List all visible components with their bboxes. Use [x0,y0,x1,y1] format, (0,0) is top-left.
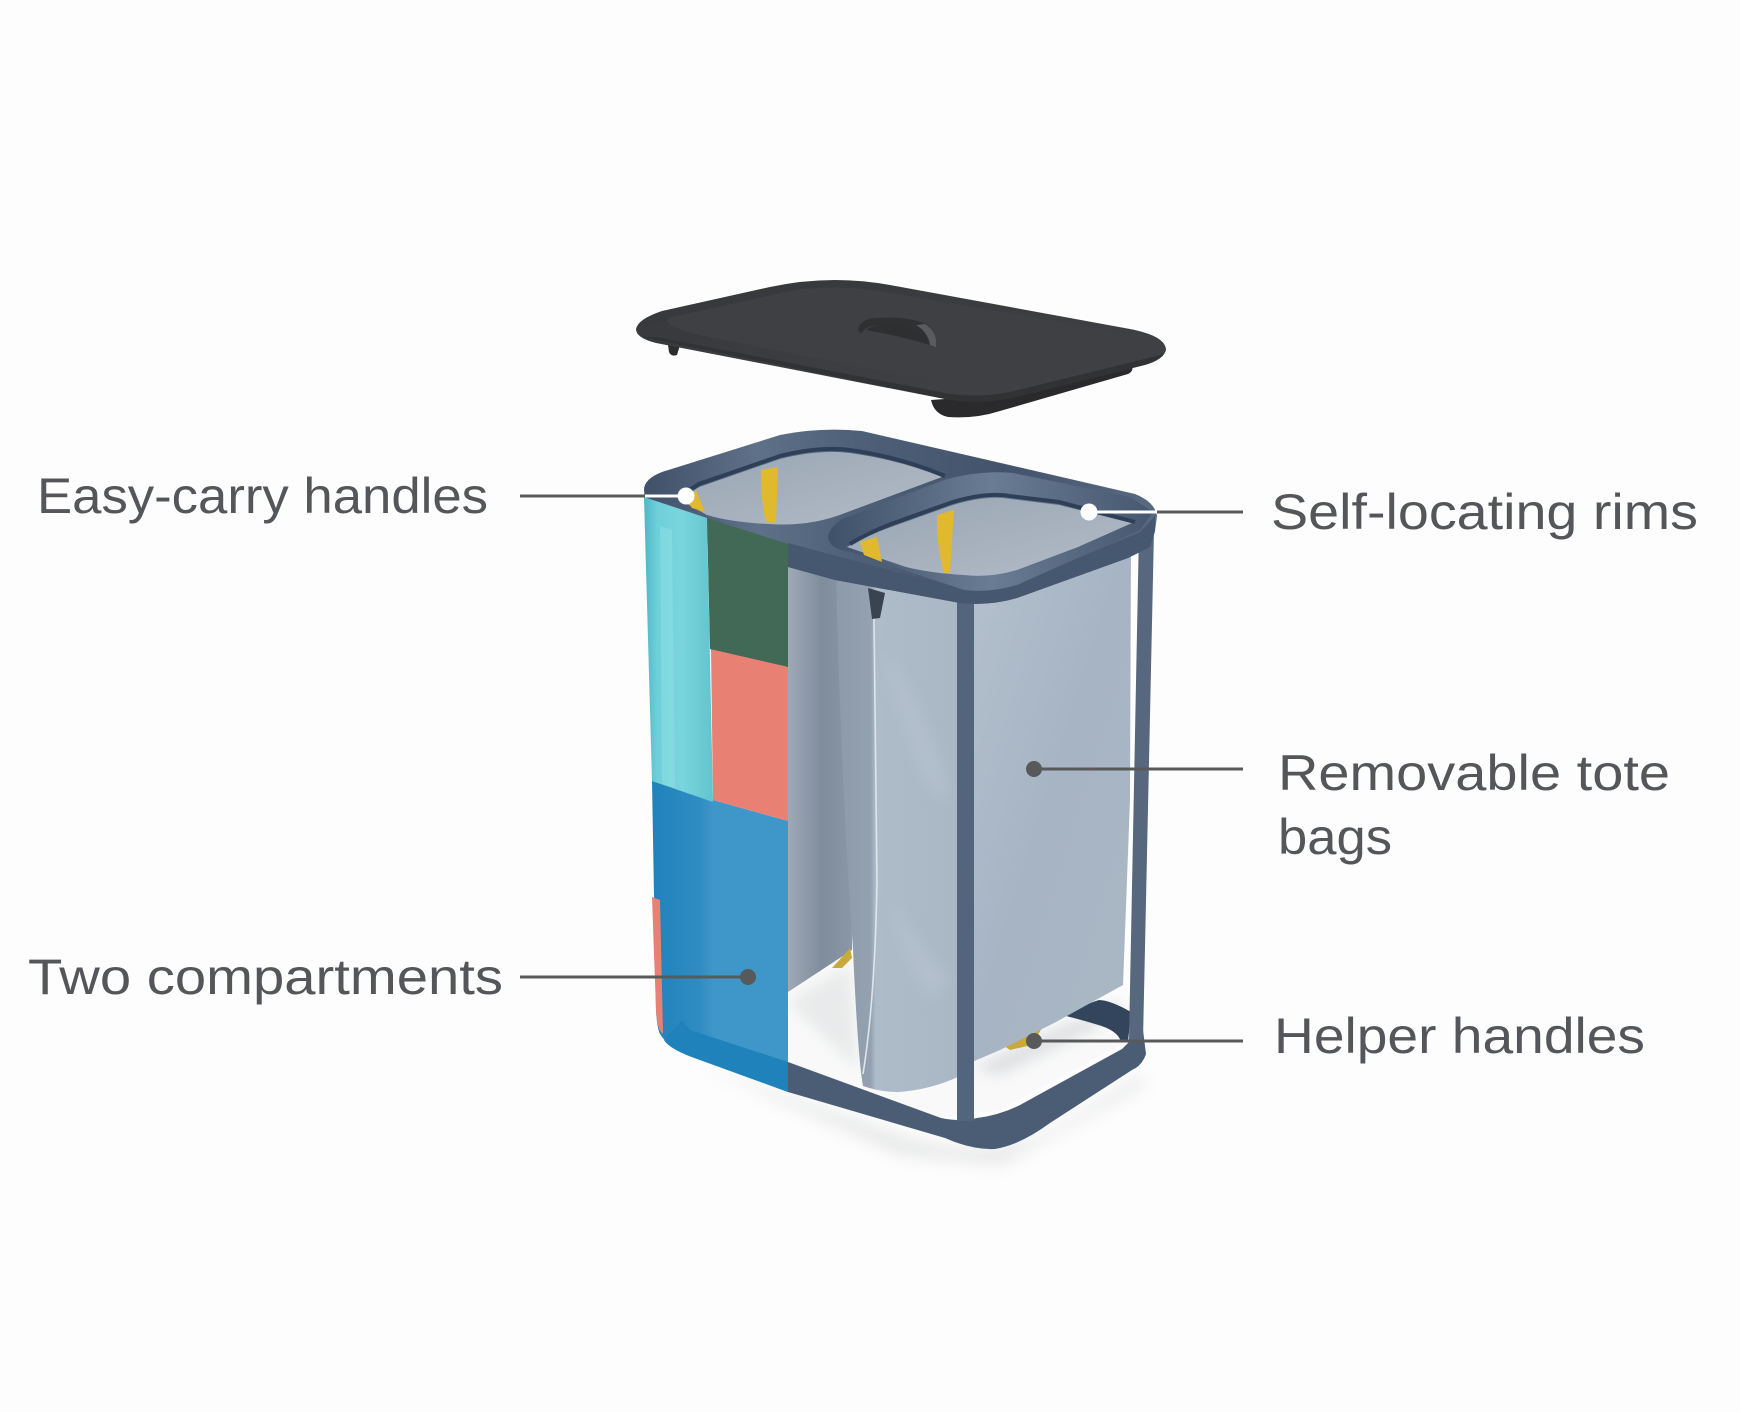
helper handle strap [1000,1019,1054,1050]
leader line [1080,504,1243,520]
illustration: laundry hamper frame and bags [644,430,1157,1149]
colour panel: green [707,518,788,667]
rear compartment opening [680,452,942,525]
bag folds [885,650,950,1000]
leader line [1026,1033,1243,1049]
colour panel: small salmon strip [652,897,663,1034]
front post [957,596,974,1121]
label: Helper handles [1274,1008,1645,1064]
callout: self-locating rims [1080,484,1698,540]
front compartment opening [847,498,1132,576]
icon: yellow handle straps [686,467,954,573]
leader line [520,488,694,504]
label: Self-locating rims [1271,484,1698,540]
floor shadow [700,1065,1145,1165]
right post [1129,530,1154,1040]
back tote bag [786,555,852,992]
icon: hamper lid [636,280,1166,417]
icon: lid handle [858,318,936,347]
callout: removable tote bags [1026,745,1670,865]
front compartment ring [828,472,1153,591]
back bag yellow strap [832,948,852,968]
label: bags [1278,809,1392,865]
base back section [1066,1000,1131,1042]
label: Removable tote [1278,745,1670,801]
floor inside base [788,952,1130,1118]
callout: easy-carry handles [37,468,694,524]
base front section [788,1030,1146,1149]
callout: two compartments [28,949,756,1005]
front tote bag face [970,545,1131,1062]
leader line [520,969,756,985]
bag seam [863,618,877,1074]
colour panel: blue [652,781,788,1092]
label: Two compartments [28,949,503,1005]
colour panel: salmon [711,649,788,821]
bag tag [868,588,885,619]
rim [644,430,1157,604]
leader line [1026,761,1243,777]
label: Easy-carry handles [37,468,488,524]
front tote bag side [836,570,960,1092]
colour panel: teal [644,497,713,802]
callout: helper handles [1026,1008,1645,1064]
